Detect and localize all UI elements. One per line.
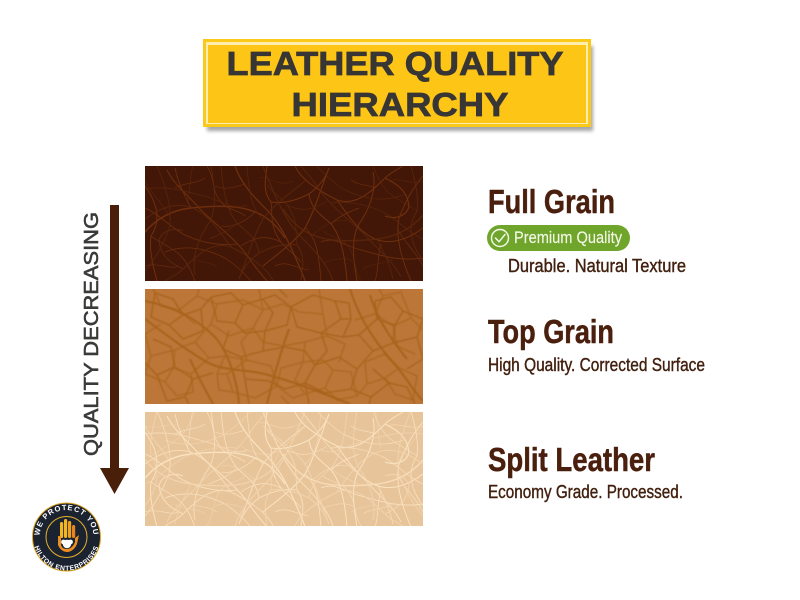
premium quality badge (487, 225, 630, 251)
arrow shaft (110, 205, 119, 469)
quality decreasing arrow (100, 205, 129, 494)
full grain description: Durable. Natural Texture (508, 256, 686, 276)
label: full grain (487, 183, 686, 276)
top grain heading: Top Grain (488, 313, 614, 350)
banner frame (204, 40, 590, 126)
title banner: HIERARCHY (292, 86, 508, 123)
logo ring text: WE PROTECT YOU (34, 504, 99, 535)
full grain heading: Full Grain (488, 183, 615, 220)
arrow head (100, 468, 129, 494)
split leather description: Economy Grade. Processed. (488, 482, 683, 502)
label: split leather (488, 441, 683, 502)
icon: protective hand (58, 519, 79, 552)
swatch: split leather (145, 411, 423, 527)
title text: LEATHER QUALITY (226, 45, 564, 82)
logo: hilton enterprises badge: HILTON ENTERPRISES (34, 546, 98, 570)
label: top grain (488, 313, 705, 375)
swatch: top grain leather (145, 289, 423, 404)
axis label: QUALITY DECREASING (81, 212, 103, 456)
infographic canvas (32, 39, 704, 572)
icon: check circle (492, 230, 508, 246)
title banner (204, 40, 593, 131)
premium quality badge: Premium Quality (514, 228, 622, 247)
swatch: full grain leather (145, 166, 423, 281)
banner shadow (207, 46, 593, 131)
top grain description: High Quality. Corrected Surface (488, 355, 705, 375)
split leather heading: Split Leather (488, 441, 655, 478)
logo: hilton enterprises badge (32, 502, 101, 572)
banner fill (208, 45, 586, 123)
